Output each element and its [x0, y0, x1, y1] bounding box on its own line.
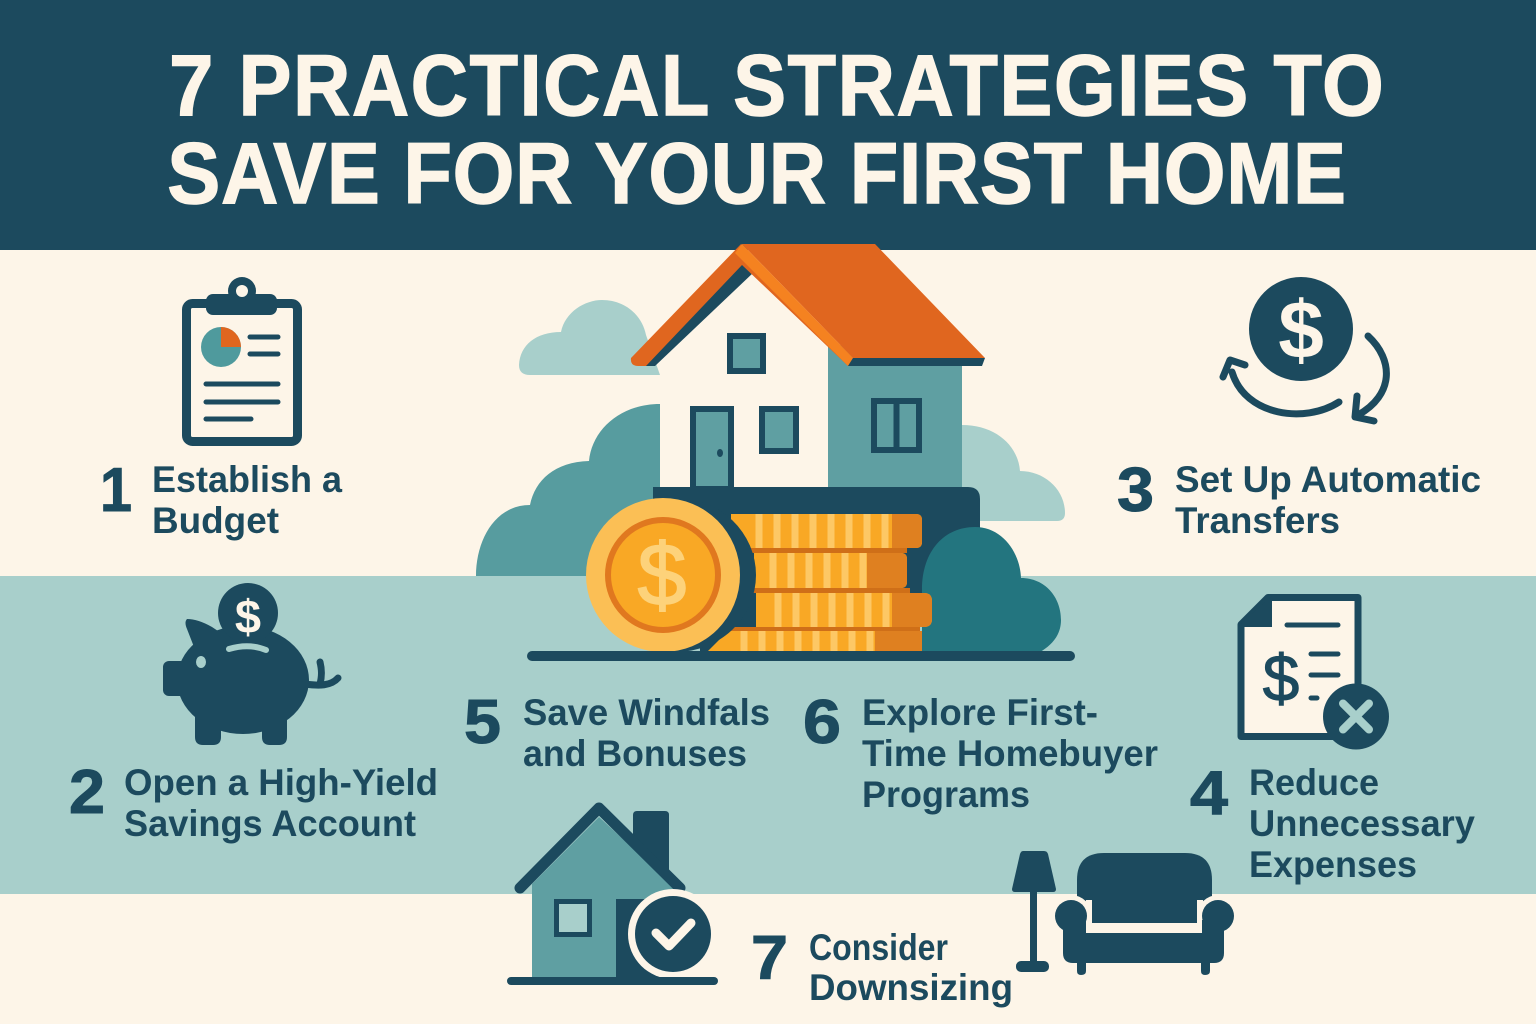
item 7: downsizing: Consider [809, 927, 948, 968]
item 6: homebuyer programs: Explore First- [862, 692, 1098, 733]
item 1: establish a budget: Establish a [152, 459, 342, 500]
icon: bill with x [1241, 596, 1389, 750]
item 2: high-yield savings: 2 [69, 758, 105, 827]
item 6: homebuyer programs: 6 [803, 688, 841, 757]
item 2: high-yield savings: Savings Account [124, 803, 416, 844]
icon: bill with x: $ [1263, 641, 1299, 715]
item 6: homebuyer programs: Time Homebuyer [862, 733, 1158, 774]
item 3: automatic transfers: Set Up Automatic [1175, 459, 1481, 500]
item 4: reduce expenses: Expenses [1249, 844, 1417, 885]
icon: piggy bank [163, 583, 338, 745]
item 7: downsizing: 7 [751, 924, 788, 993]
item 7: downsizing: Downsizing [809, 967, 1013, 1008]
item 2: high-yield savings: Open a High-Yield [124, 762, 438, 803]
item 7: downsizing [751, 924, 1013, 1008]
central illustration: house and coins [476, 244, 1075, 661]
icon: piggy bank: $ [235, 590, 261, 643]
item 5: windfalls: Save Windfals [523, 692, 770, 733]
item 6: homebuyer programs: Programs [862, 774, 1030, 815]
item 4: reduce expenses: Unnecessary [1249, 803, 1475, 844]
item 1: establish a budget: 1 [100, 456, 132, 525]
icon: lamp and sofa [1012, 851, 1239, 975]
coin [586, 498, 756, 652]
icon: dollar cycle [1223, 277, 1386, 421]
item 2: high-yield savings [69, 758, 438, 844]
icon: dollar cycle: $ [1278, 285, 1324, 376]
item 3: automatic transfers: Transfers [1175, 500, 1340, 541]
item 6: homebuyer programs [803, 688, 1158, 815]
bush [922, 527, 1061, 652]
item 3: automatic transfers [1117, 456, 1481, 541]
item 4: reduce expenses: 4 [1190, 759, 1229, 828]
item 1: establish a budget: Budget [152, 500, 279, 541]
item 5: windfalls [464, 688, 770, 774]
item 5: windfalls: and Bonuses [523, 733, 747, 774]
item 3: automatic transfers: 3 [1117, 456, 1154, 525]
item 5: windfalls: 5 [464, 688, 501, 757]
item 4: reduce expenses: Reduce [1249, 762, 1379, 803]
clouds [476, 300, 1065, 576]
title: SAVE FOR YOUR FIRST HOME [167, 125, 1346, 222]
title: 7 PRACTICAL STRATEGIES TO [169, 37, 1384, 134]
icon: clipboard budget [186, 277, 298, 442]
house [631, 244, 985, 490]
ground line [527, 651, 1075, 661]
ledge [653, 487, 980, 652]
item 1: establish a budget [100, 456, 342, 541]
item 4: reduce expenses [1190, 759, 1475, 885]
header banner [0, 0, 1536, 250]
coin stack [707, 514, 932, 652]
title [167, 37, 1384, 222]
icon: small house with check [507, 808, 718, 985]
coin: $ [638, 525, 686, 624]
